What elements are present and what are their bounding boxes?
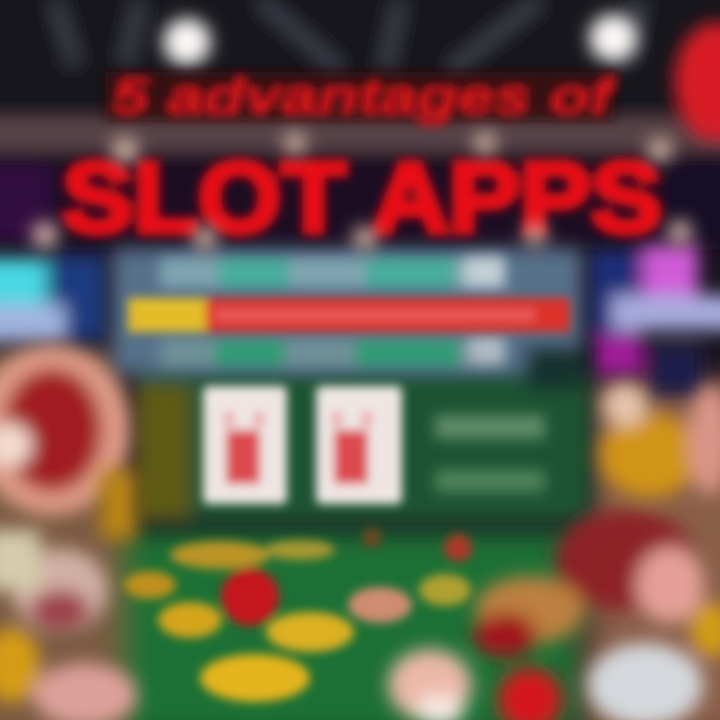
right side lights panel: [590, 245, 720, 395]
reel card left: [203, 386, 287, 504]
marquee bulbs: [32, 132, 692, 250]
casino chips and coins: [0, 345, 720, 720]
ceiling background: [0, 0, 720, 250]
left gold: [0, 470, 137, 720]
lights: [163, 14, 637, 66]
banner bar: [128, 298, 570, 332]
title: SLOT APPS: SLOT APPS: [62, 142, 662, 254]
reel card right: [316, 386, 402, 504]
slot reels: [203, 386, 402, 504]
table felt: [0, 350, 720, 720]
right chips: [388, 383, 720, 720]
centre coins: [124, 528, 472, 702]
side text lines: [435, 415, 545, 492]
title band dark: [105, 72, 615, 120]
title: 5 advantages of: 5 advantages of: [112, 68, 618, 126]
left side lights panel: [0, 255, 105, 342]
red balloon: [674, 22, 720, 142]
left red chip: [0, 345, 130, 515]
central machine: [112, 248, 590, 522]
